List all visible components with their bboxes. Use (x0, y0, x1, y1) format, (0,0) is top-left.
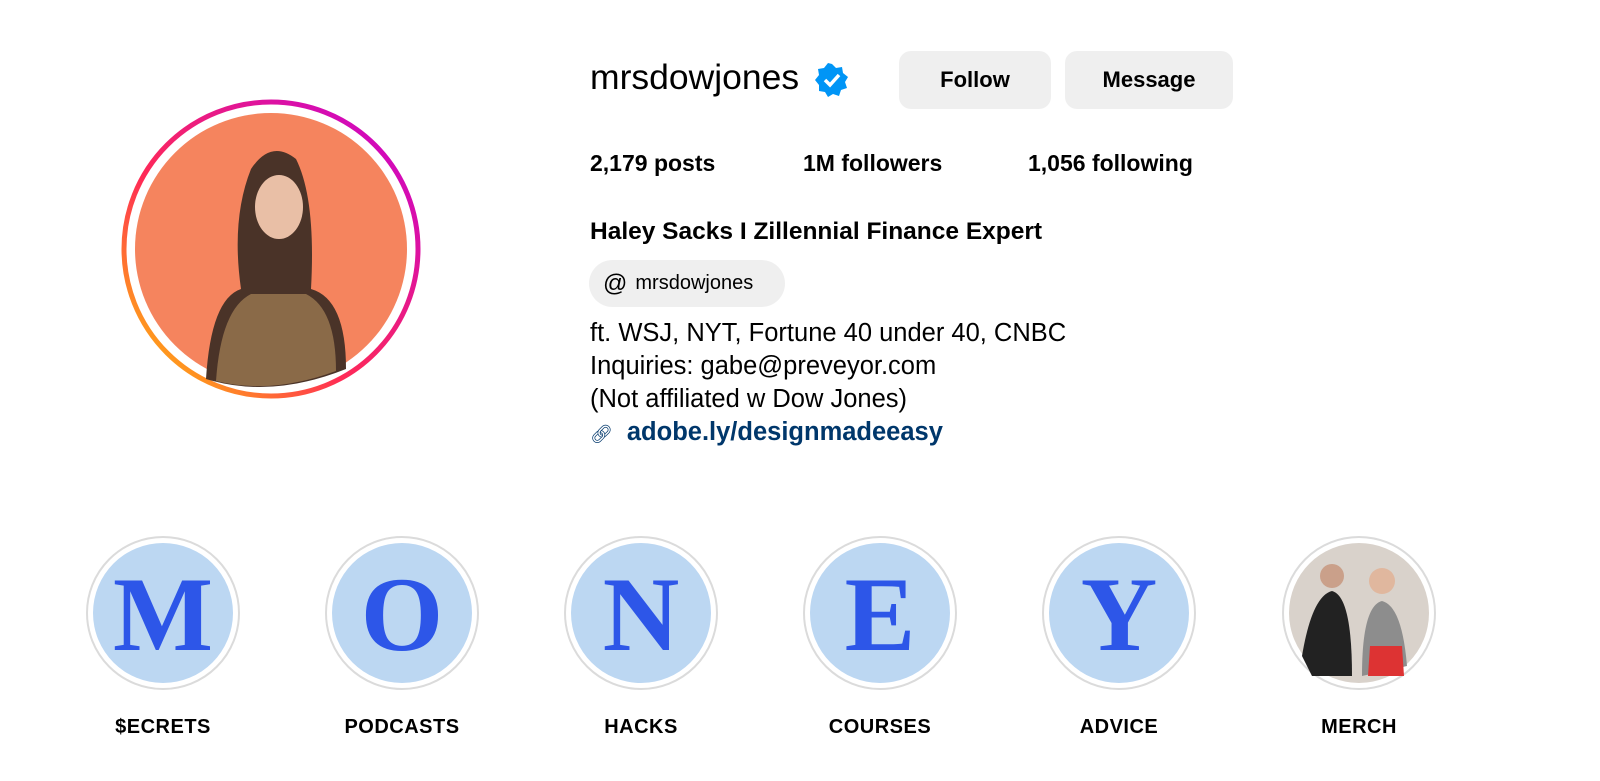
username: mrsdowjones (590, 57, 799, 97)
bio text: Inquiries: gabe@preveyor.com (590, 352, 936, 380)
name heading: Haley Sacks I Zillennial Finance Expert (590, 218, 1042, 245)
button: follow (899, 51, 1051, 109)
highlight: N: N (603, 556, 679, 673)
button: follow: Follow (940, 67, 1010, 92)
bio text: 🔗︎ adobe.ly/designmadeeasy (590, 418, 943, 446)
bio text (590, 319, 1066, 446)
highlight: M (86, 536, 240, 690)
stats (590, 150, 1193, 176)
highlight: Y: Y (1081, 556, 1157, 673)
stats: 1M followers (803, 150, 942, 176)
button: message (1065, 51, 1233, 109)
highlights: HACKS (604, 716, 678, 738)
threads pill: @ (603, 270, 627, 296)
button: message: Message (1103, 67, 1195, 92)
highlights (86, 536, 1436, 738)
highlight: O: O (361, 556, 443, 673)
highlights: ADVICE (1080, 716, 1158, 738)
highlight: merch photo (1282, 536, 1436, 690)
highlights: PODCASTS (344, 716, 460, 738)
stats: 2,179 posts (590, 150, 715, 176)
bio text: (Not affiliated w Dow Jones) (590, 385, 907, 413)
highlights: COURSES (829, 716, 931, 738)
labels: $ECRETS (115, 716, 211, 738)
profile picture (122, 100, 420, 398)
icon: verified badge (815, 63, 848, 97)
stats: 1,056 following (1028, 150, 1193, 176)
highlight: E (803, 536, 957, 690)
threads pill (589, 260, 785, 307)
highlight: M: M (113, 556, 213, 673)
highlight: E: E (845, 556, 915, 673)
highlight: O (325, 536, 479, 690)
highlights: MERCH (1321, 716, 1397, 738)
bio text: ft. WSJ, NYT, Fortune 40 under 40, CNBC (590, 319, 1066, 347)
highlight: Y (1042, 536, 1196, 690)
highlight: N (564, 536, 718, 690)
threads pill: mrsdowjones (635, 272, 753, 294)
